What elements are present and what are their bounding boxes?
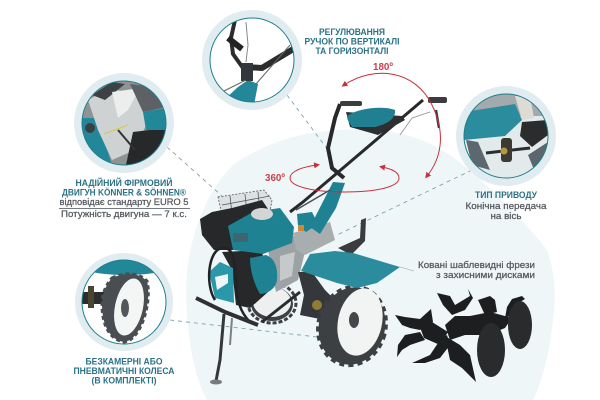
- text: cutters: [418, 260, 535, 281]
- label 360 degrees: 360º: [265, 173, 285, 184]
- dashed connector: handles: [287, 95, 328, 150]
- text: engine: відповідає стандарту EURO 5: [60, 197, 188, 208]
- inset: engine close-up: [74, 73, 174, 173]
- text: wheels: ПНЕВМАТИЧНІ КОЛЕСА: [74, 366, 175, 377]
- left grip: [340, 101, 362, 106]
- text: handle adjustment: [304, 27, 400, 57]
- stand: [210, 314, 232, 384]
- recoil cover: [250, 255, 277, 294]
- text: drive type: ТИП ПРИВОДУ: [475, 190, 537, 201]
- tiller machine: [196, 97, 447, 384]
- right blades: [437, 289, 473, 315]
- background shape: [186, 129, 555, 400]
- silver column base: [293, 222, 335, 255]
- cables: [400, 112, 430, 135]
- text: cutters: з захисними дисками: [436, 270, 535, 281]
- rear stalk: [338, 218, 366, 255]
- rotation arrow 180: [344, 73, 440, 176]
- engine rear block: [200, 200, 270, 250]
- rotary cutters: [395, 289, 532, 382]
- fender: [301, 251, 400, 288]
- front guard teal: [209, 262, 234, 303]
- text: engine: НАДІЙНИЙ ФІРМОВИЙ: [76, 177, 173, 189]
- text: handle adjustment: РУЧОК ПО ВЕРТИКАЛІ: [304, 36, 400, 48]
- frame tube: [209, 248, 250, 322]
- engine tank: [228, 208, 294, 254]
- inset: wheel close-up: [75, 253, 173, 351]
- brace to engine: [262, 292, 300, 322]
- dashed connector: engine: [167, 147, 222, 196]
- arm: [445, 312, 512, 340]
- engine dark side: [222, 250, 268, 308]
- right lever: [436, 110, 439, 128]
- text: engine: [59, 177, 190, 220]
- text: cutters: Ковані шаблевидні фрези: [418, 260, 535, 271]
- inset: handle adjustment close-up: [202, 10, 302, 110]
- front wheel: [310, 280, 394, 372]
- gearbox: [268, 235, 308, 292]
- front bar: [196, 298, 258, 325]
- dashed connector: drive: [337, 170, 472, 235]
- rear wheel: [248, 283, 296, 323]
- handle cross bar: [346, 112, 405, 135]
- label 180 degrees: 180º: [373, 62, 393, 73]
- text: handle adjustment: ТА ГОРИЗОНТАЛІ: [316, 46, 388, 57]
- text: engine: ДВИГУН KÖNNER & SÖHNEN®: [62, 188, 186, 198]
- inset: drive type close-up: [456, 86, 556, 186]
- left blades: [395, 309, 433, 330]
- centre blade: [445, 336, 476, 382]
- text: engine: Потужність двигуна — 7 к.с.: [61, 209, 187, 220]
- handle left tube: [328, 104, 344, 178]
- text: handle adjustment: РЕГУЛЮВАННЯ: [319, 27, 385, 38]
- small disc: [508, 301, 532, 349]
- rotation arrow 360: [290, 165, 399, 192]
- basket: [218, 190, 272, 215]
- text: drive type: [466, 190, 547, 222]
- text: wheels: [74, 356, 175, 386]
- large disc: [477, 323, 505, 377]
- control panel: [347, 108, 395, 127]
- column: [310, 182, 345, 234]
- transmission: [298, 272, 335, 320]
- text: wheels: (В КОМПЛЕКТІ): [92, 376, 156, 386]
- cutter leader line: [400, 267, 414, 271]
- text: wheels: БЕЗКАМЕРНІ АБО: [86, 356, 162, 368]
- text: drive type: Конічна передача: [466, 201, 547, 212]
- right grip: [428, 97, 447, 103]
- text: drive type: на вісь: [490, 211, 522, 222]
- gear rod: [290, 100, 423, 212]
- dashed connector: wheels: [170, 320, 317, 337]
